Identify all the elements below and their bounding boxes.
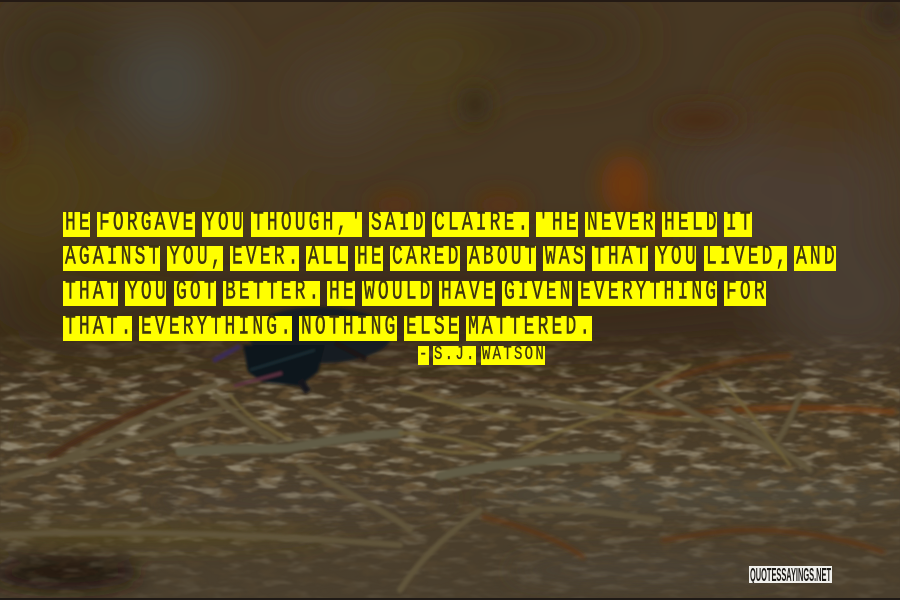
quote line 3: EVERYTHING <box>580 278 719 308</box>
quote line 3: BETTER. <box>225 278 322 308</box>
quote line 1: HELD <box>664 209 720 239</box>
quote line 1: YOU <box>204 209 246 239</box>
quote line 3: GIVEN <box>504 278 574 308</box>
quote line 1 <box>63 209 754 239</box>
quote line 3: THAT <box>65 278 121 308</box>
quote line 2: YOU, <box>169 243 225 273</box>
mottled straw texture <box>0 337 900 598</box>
quote line 2: THAT <box>594 243 650 273</box>
quote line 4: NOTHING <box>301 313 398 343</box>
author attribution: WATSON <box>482 344 546 366</box>
quote line 3: HE <box>329 278 357 308</box>
quote line 2: AND <box>796 243 838 273</box>
quote line 1: THOUGH,' <box>253 209 364 239</box>
quote line 1: HE <box>65 209 93 239</box>
quote line 2: WAS <box>545 243 587 273</box>
reddish straws <box>483 356 883 557</box>
quote line 2: YOU <box>657 243 699 273</box>
quote line 2: CARED <box>392 243 462 273</box>
quote line 2: ABOUT <box>469 243 539 273</box>
quote line 2 <box>63 243 838 273</box>
quote line 2: HE <box>357 243 385 273</box>
quote line 4: EVERYTHING. <box>141 313 294 343</box>
author attribution: - <box>419 344 430 366</box>
quote line 4 <box>63 313 593 343</box>
author attribution <box>418 344 546 366</box>
quote line 2: EVER. <box>232 243 302 273</box>
quote line 2: ALL <box>308 243 350 273</box>
quote line 3: YOU <box>127 278 169 308</box>
quote line 1: NEVER <box>587 209 657 239</box>
quote line 1: 'HE <box>538 209 580 239</box>
author attribution: S.J. <box>434 344 477 366</box>
quote line 2: AGAINST <box>65 243 162 273</box>
quote line 3: HAVE <box>441 278 497 308</box>
quote line 4: ELSE <box>406 313 462 343</box>
quote text <box>63 209 838 343</box>
quote line 4: THAT. <box>65 313 135 343</box>
quote line 3: FOR <box>726 278 768 308</box>
quote line 3: WOULD <box>364 278 434 308</box>
quote line 3: GOT <box>176 278 218 308</box>
quote line 2: LIVED, <box>706 243 790 273</box>
beetle <box>213 307 392 392</box>
pale straws <box>180 433 617 476</box>
quote line 1: FORGAVE <box>99 209 196 239</box>
quote line 1: CLAIRE. <box>434 209 531 239</box>
quote line 3 <box>63 278 768 308</box>
quote line 4: MATTERED. <box>468 313 593 343</box>
quote line 1: IT <box>726 209 754 239</box>
quote line 1: SAID <box>371 209 427 239</box>
